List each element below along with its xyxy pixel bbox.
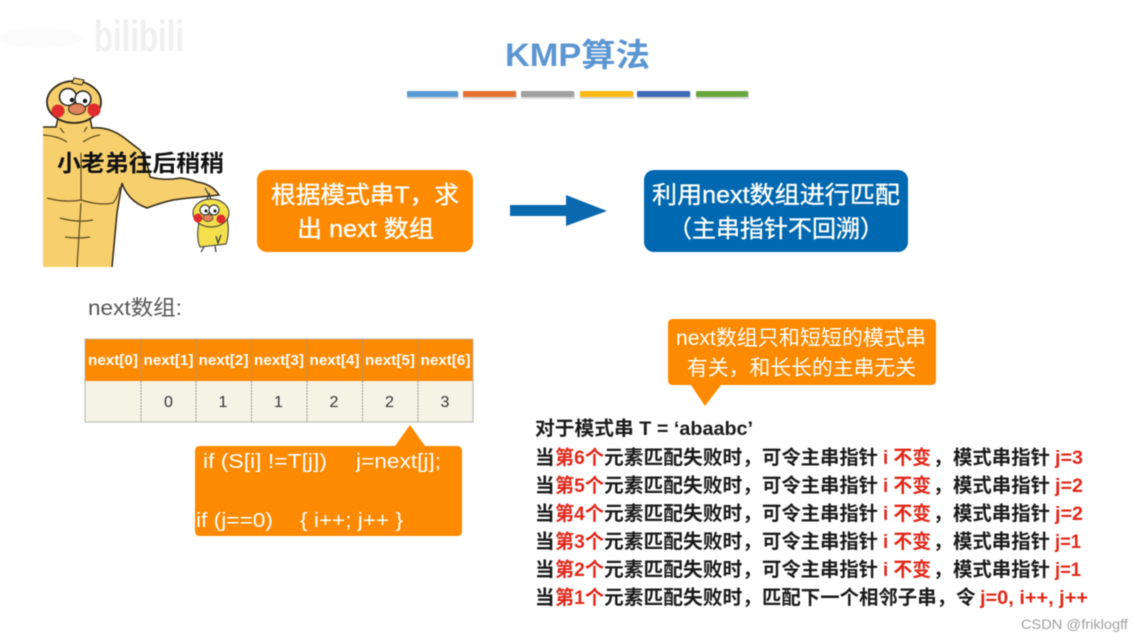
table header: next[0] [88, 352, 138, 369]
rule: 6th element: 第6个 [555, 447, 604, 469]
big duck cheeks and beak [52, 104, 100, 118]
rule: 4th element: ， [933, 503, 953, 525]
rule: 2nd element: 元素匹配失败时， [604, 559, 762, 581]
rule: 2nd element: i 不变 [883, 558, 931, 581]
table values: 2 [385, 394, 394, 411]
table values: 1 [274, 394, 283, 411]
callout: code rules: if (S[i] !=T[j]) [203, 451, 327, 473]
small duck [193, 188, 229, 252]
rule: 1st element [535, 586, 1088, 609]
rule: 3rd element: j=1 [1054, 531, 1081, 553]
rule: 3rd element: ， [933, 531, 953, 553]
big duck head [47, 81, 101, 123]
rule: 5th element: i 不变 [883, 474, 931, 497]
rule: 1st element: 令 [956, 586, 976, 609]
callout: next depends only on pattern: 有关，和长长的主串无关 [687, 357, 916, 380]
rule: 6th element: 元素匹配失败时， [604, 447, 762, 469]
muscular duck outline [43, 118, 219, 267]
callout: code rules [195, 425, 462, 536]
rule: 4th element: 当 [535, 503, 555, 525]
text block: failure rules [535, 417, 1088, 609]
watermark: CSDN: CSDN @friklogff [1021, 616, 1128, 632]
muscle lines [43, 127, 120, 267]
rule heading: 对于模式串 T = ‘abaabc’ [535, 417, 753, 440]
box: compute next array [257, 170, 473, 252]
muscular duck body [43, 116, 219, 267]
watermark: bilibili [0, 12, 184, 61]
rule: 2nd element: 第2个 [555, 559, 604, 581]
rule: 1st element: j=0, i++, j++ [979, 587, 1088, 609]
rule: 6th element: j=3 [1054, 447, 1083, 469]
rule: 3rd element: i 不变 [883, 530, 931, 553]
rule: 6th element [535, 446, 1083, 469]
table header: next[1] [144, 352, 194, 369]
rule: 5th element: ， [933, 475, 953, 497]
rule: 2nd element: 当 [535, 559, 555, 581]
rule: 1st element: 元素匹配失败时， [604, 587, 762, 609]
rule: 4th element: 元素匹配失败时， [604, 503, 762, 525]
rule: 3rd element: 元素匹配失败时， [604, 531, 762, 553]
box: match using next array: （主串指针不回溯） [668, 216, 884, 243]
callout: next depends only on pattern: next数组只和短短的模式串 [676, 327, 926, 350]
rule: 4th element: j=2 [1054, 503, 1083, 525]
rule: 5th element [535, 474, 1083, 497]
callout: code rules: if (j==0) [196, 510, 273, 532]
rule: 4th element: 第4个 [555, 503, 604, 525]
rule: 4th element [535, 502, 1083, 525]
illustration: muscular duck holding small duck [43, 78, 229, 267]
rule: 1st element: 第1个 [555, 587, 604, 609]
rule: 6th element: i 不变 [883, 446, 931, 469]
colour bar divider [407, 91, 749, 99]
box: compute next array: 根据模式串T，求 [271, 182, 459, 209]
table values: 0 [164, 394, 173, 411]
rule: 4th element: 可令主串指针 [762, 502, 878, 525]
rule: 4th element: 模式串指针 [953, 502, 1050, 525]
rule: 5th element: 元素匹配失败时， [604, 475, 762, 497]
big duck eyes [60, 88, 91, 107]
table header [88, 352, 470, 369]
rule: 6th element: ， [933, 447, 953, 469]
rule: 6th element: 当 [535, 447, 555, 469]
illustration caption: 小老弟往后稍稍 [57, 150, 224, 176]
rule: 5th element: 当 [535, 475, 555, 497]
rule: 2nd element: 可令主串指针 [762, 558, 878, 581]
table header: next[5] [365, 352, 415, 369]
table values: 3 [441, 394, 450, 411]
label: next array: next数组: [88, 297, 182, 320]
rule: 3rd element: 可令主串指针 [762, 530, 878, 553]
rule: 6th element: 模式串指针 [953, 446, 1050, 469]
rule: 2nd element: 模式串指针 [953, 558, 1050, 581]
rule: 3rd element: 模式串指针 [953, 530, 1050, 553]
table header: next[6] [420, 352, 470, 369]
rule: 3rd element [535, 530, 1081, 553]
callout: code rules: { i++; j++ } [300, 510, 403, 532]
rule: 5th element: 可令主串指针 [762, 474, 878, 497]
table header: next[2] [198, 352, 248, 369]
rule: 3rd element: 第3个 [555, 531, 604, 553]
callout: next depends only on pattern [668, 319, 936, 406]
table values [164, 394, 450, 411]
table header: next[4] [310, 352, 360, 369]
callout: code rules: j=next[j]; [355, 451, 441, 473]
rule: 4th element: i 不变 [883, 502, 931, 525]
table: next array [85, 339, 473, 422]
rule: 3rd element: 当 [535, 531, 555, 553]
title: KMP算法 [505, 37, 650, 73]
rule: 1st element: 当 [535, 587, 555, 609]
rule: 2nd element [535, 558, 1081, 581]
table values: 1 [219, 394, 228, 411]
watermark: bilibili: bilibili [94, 12, 184, 61]
rule: 5th element: 第5个 [555, 475, 604, 497]
rule: 5th element: j=2 [1054, 475, 1083, 497]
table values: 2 [330, 394, 339, 411]
table header: next[3] [254, 352, 304, 369]
rule: 1st element: 匹配下一个相邻子串， [762, 587, 956, 609]
rule: 2nd element: ， [933, 559, 953, 581]
box: match using next array: 利用next数组进行匹配 [652, 182, 900, 209]
arrow: to matching step [510, 195, 607, 226]
box: compute next array: 出 next 数组 [297, 216, 434, 243]
rule: 2nd element: j=1 [1054, 559, 1081, 581]
rule: 6th element: 可令主串指针 [762, 446, 878, 469]
box: match using next array [644, 170, 908, 252]
rule: 5th element: 模式串指针 [953, 474, 1050, 497]
